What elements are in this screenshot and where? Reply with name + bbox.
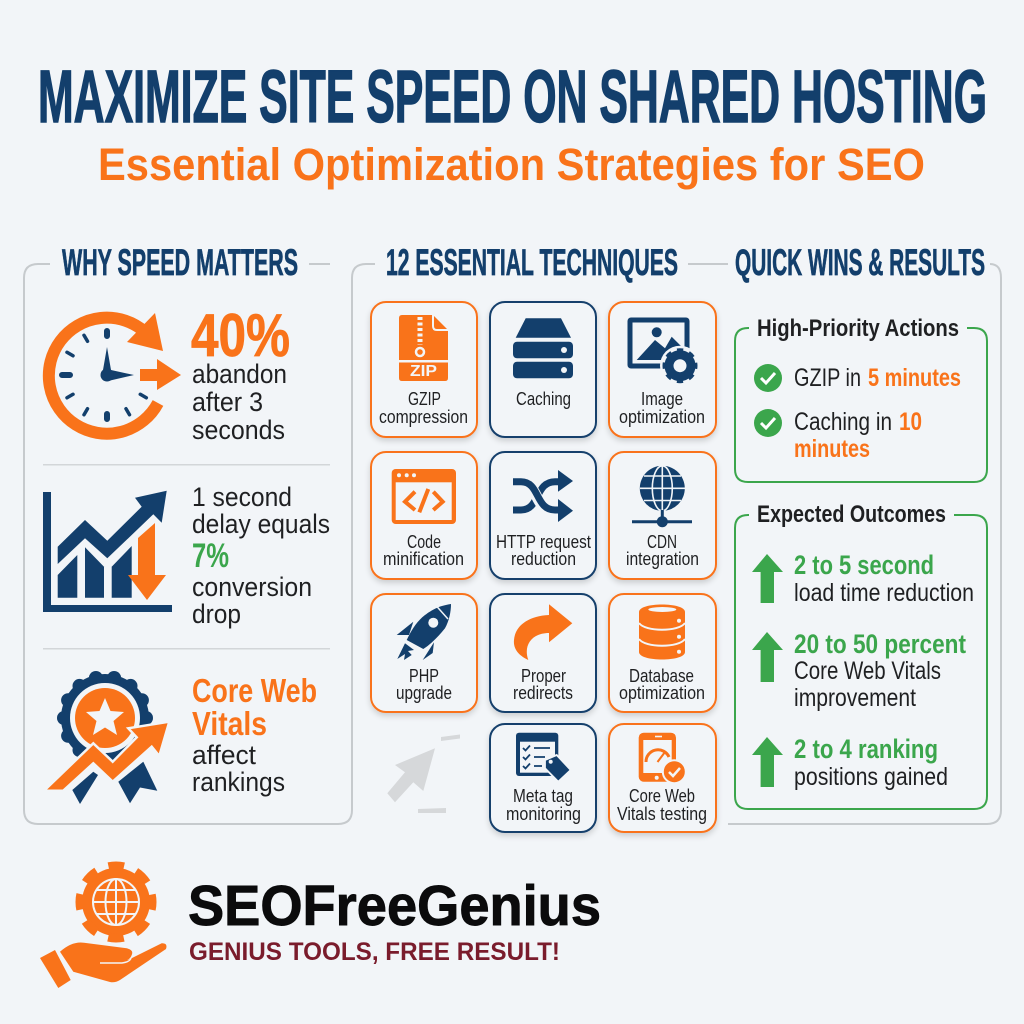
outcome: ranking: 2 to 4 ranking (794, 734, 938, 764)
card: php upgrade (371, 594, 477, 712)
action: gzip in 5 minutes (794, 364, 961, 392)
stat: core web vitals: affect (192, 740, 256, 770)
panel: 12 essential techniques (371, 242, 716, 832)
outcome: load time: 2 to 5 second (794, 550, 934, 580)
heading: why speed matters: WHY SPEED MATTERS (62, 242, 298, 283)
icon: award badge with arrow (44, 671, 169, 804)
action: caching in 10 minutes: minutes (794, 435, 870, 463)
arrow up (752, 632, 783, 682)
stat: core web vitals: Vitals (192, 705, 267, 742)
stat: 40 percent: after 3 (192, 387, 263, 417)
panel: quick wins and results (735, 242, 987, 809)
action: caching in 10 minutes: Caching in (794, 408, 892, 436)
stat: core web vitals: Core Web (192, 672, 317, 709)
box: expected outcomes (735, 501, 987, 809)
card: database optimization (609, 594, 716, 712)
card: gzip compression: GZIP (408, 389, 441, 409)
outcome: ranking: positions gained (794, 763, 948, 791)
card: database optimization: Database (629, 666, 694, 686)
card: caching (490, 302, 596, 437)
stat: 40 percent: abandon (192, 359, 287, 389)
stat: core web vitals: rankings (192, 767, 285, 797)
icon: chart with drop arrow (43, 491, 172, 612)
outcome: core web vitals: Core Web Vitals (794, 657, 941, 685)
action: caching in 10 minutes (794, 408, 922, 463)
card: proper redirects (490, 594, 596, 712)
stat: 7 percent: delay equals (192, 509, 330, 539)
outcome: core web vitals: improvement (794, 684, 916, 712)
card: image optimization: optimization (619, 407, 705, 427)
card: gzip compression: compression (379, 407, 468, 427)
card: core web vitals testing (609, 724, 716, 832)
outcome: load time: load time reduction (794, 579, 974, 607)
action: gzip in 5 minutes: 5 minutes (868, 364, 961, 392)
stat: 7 percent (192, 482, 330, 629)
footer logo (40, 866, 601, 988)
card: cdn integration (609, 452, 716, 579)
card: cdn integration: integration (626, 549, 699, 569)
heading: 12 essential techniques: 12 ESSENTIAL TECHNIQUES (386, 242, 678, 283)
icon: clock with arrows (49, 313, 181, 434)
icon: gear globe and hand (40, 866, 166, 988)
icon: check (754, 364, 782, 392)
card: cdn integration: CDN (647, 532, 677, 552)
outcome: core web vitals: 20 to 50 percent (794, 629, 966, 659)
stat: 40 percent: 40% (191, 302, 290, 369)
stat: 7 percent: conversion (192, 572, 312, 602)
box: high-priority actions: High-Priority Actions (757, 315, 959, 342)
card: proper redirects: redirects (513, 683, 573, 703)
box: high-priority actions (735, 315, 987, 482)
box: expected outcomes: Expected Outcomes (757, 501, 946, 528)
stat: 40 percent (191, 302, 290, 445)
outcome: load time (794, 550, 974, 607)
stat: 40 percent: seconds (192, 415, 285, 445)
tagline: GENIUS TOOLS, FREE RESULT! (189, 938, 560, 966)
card: caching: Caching (516, 389, 571, 409)
card: http request reduction (490, 452, 596, 579)
header (38, 55, 987, 190)
card: proper redirects: Proper (521, 666, 566, 686)
subtitle: Essential Optimization Strategies for SEO (98, 139, 925, 190)
card: code minification: Code (407, 532, 441, 552)
card: meta tag monitoring: Meta tag (513, 786, 573, 806)
panel outlines (24, 264, 1001, 824)
arrow up (752, 737, 783, 787)
card: core web vitals testing: Vitals testing (617, 804, 707, 824)
stat: core web vitals (192, 672, 317, 797)
icon: check (754, 409, 782, 437)
card: core web vitals testing: Core Web (629, 786, 695, 806)
card: code minification (371, 452, 477, 579)
stat: 7 percent: drop (192, 599, 241, 629)
panel: why speed matters (43, 242, 330, 804)
outcome: ranking (794, 734, 948, 791)
stat: 7 percent: 7% (192, 537, 229, 575)
stat: 7 percent: 1 second (192, 482, 292, 512)
decorative cursor arrow (387, 734, 460, 813)
card: image optimization: Image (641, 389, 683, 409)
action: caching in 10 minutes: 10 (899, 408, 922, 436)
brand name: SEOFreeGenius (188, 874, 601, 938)
card: php upgrade: PHP (409, 666, 439, 686)
card: database optimization: optimization (619, 683, 705, 703)
card: http request reduction: reduction (511, 549, 576, 569)
card: image optimization (609, 302, 716, 437)
action: gzip in 5 minutes: GZIP in (794, 364, 861, 392)
card: http request reduction: HTTP request (496, 532, 591, 552)
card: gzip compression (371, 302, 477, 437)
card: gzip compression: ZIP (410, 363, 437, 380)
card: code minification: minification (383, 549, 464, 569)
outcome: core web vitals (794, 629, 966, 712)
card: meta tag monitoring (490, 724, 596, 832)
arrow up (752, 554, 783, 603)
card: meta tag monitoring: monitoring (506, 804, 581, 824)
card: php upgrade: upgrade (396, 683, 452, 703)
